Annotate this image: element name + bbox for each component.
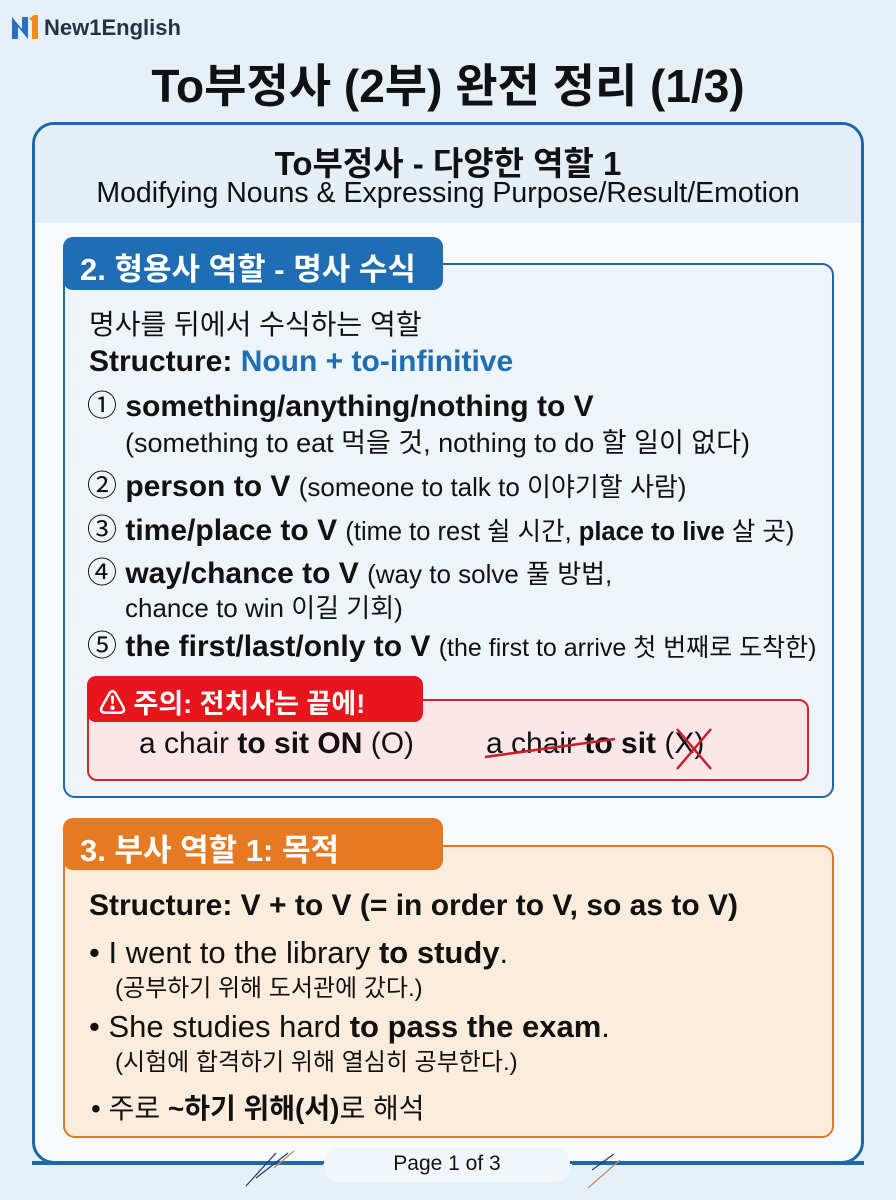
- panel: section 3: [63, 845, 834, 1138]
- item 1: (something to eat 먹을 것, nothing to do 할 일이 없다): [125, 428, 750, 458]
- text: structure: Structure: V + to V (= in order to V, so as to V): [89, 889, 738, 922]
- tab: warning heading: ⚠ 주의: 전치사는 끝에!: [99, 689, 365, 719]
- text: wrong example: a chair to sit (X): [486, 727, 704, 760]
- bullet 1: [89, 935, 508, 1002]
- strike marks: [484, 728, 712, 770]
- item 4: chance to win 이길 기회): [125, 593, 403, 623]
- subtitle: To부정사 - 다양한 역할 1: [275, 145, 621, 182]
- text: correct example: a chair to sit ON (O): [139, 727, 414, 760]
- subtitle english: Modifying Nouns & Expressing Purpose/Result/Emotion: [96, 177, 800, 209]
- header band: [35, 125, 861, 223]
- bullet 2: [89, 1009, 610, 1076]
- icon: logo mark: [12, 15, 38, 39]
- bullet 1: • I went to the library to study.: [89, 935, 508, 970]
- tab: section 3 heading: 3. 부사 역할 1: 목적: [80, 833, 339, 868]
- item 2: ② person to V (someone to talk to 이야기할 사람): [87, 470, 686, 503]
- text: structure: Structure: Noun + to-infinitive: [89, 345, 513, 378]
- page indicator: Page 1 of 3: [393, 1152, 501, 1175]
- tab: section 3 heading: [63, 818, 443, 870]
- item 4: [87, 557, 612, 623]
- callout: warning: [87, 699, 809, 781]
- item 3: ③ time/place to V (time to rest 쉴 시간, place to live 살 곳): [87, 514, 794, 547]
- text: description: 명사를 뒤에서 수식하는 역할: [89, 309, 421, 340]
- footer: [32, 1150, 864, 1188]
- item 1: ① something/anything/nothing to V: [87, 390, 594, 423]
- tab: section 2 heading: [63, 237, 443, 290]
- tab: section 2 heading: 2. 형용사 역할 - 명사 수식: [80, 252, 416, 287]
- bullet 2: (시험에 합격하기 위해 열심히 공부한다.): [115, 1049, 518, 1076]
- title: To부정사 (2부) 완전 정리 (1/3): [151, 60, 745, 112]
- logo: New1English: [44, 15, 181, 40]
- bullet 2: • She studies hard to pass the exam.: [89, 1009, 610, 1044]
- item 4: ④ way/chance to V (way to solve 풀 방법,: [87, 557, 612, 590]
- item 1: [87, 390, 750, 458]
- page indicator: [324, 1148, 570, 1182]
- tab: warning heading: [87, 676, 423, 722]
- item 5: ⑤ the first/last/only to V (the first to arrive 첫 번째로 도착한): [87, 630, 816, 663]
- bullet 3: • 주로 ~하기 위해(서)로 해석: [91, 1093, 425, 1124]
- bullet 1: (공부하기 위해 도서관에 갔다.): [115, 975, 423, 1002]
- panel: section 2: [63, 263, 834, 798]
